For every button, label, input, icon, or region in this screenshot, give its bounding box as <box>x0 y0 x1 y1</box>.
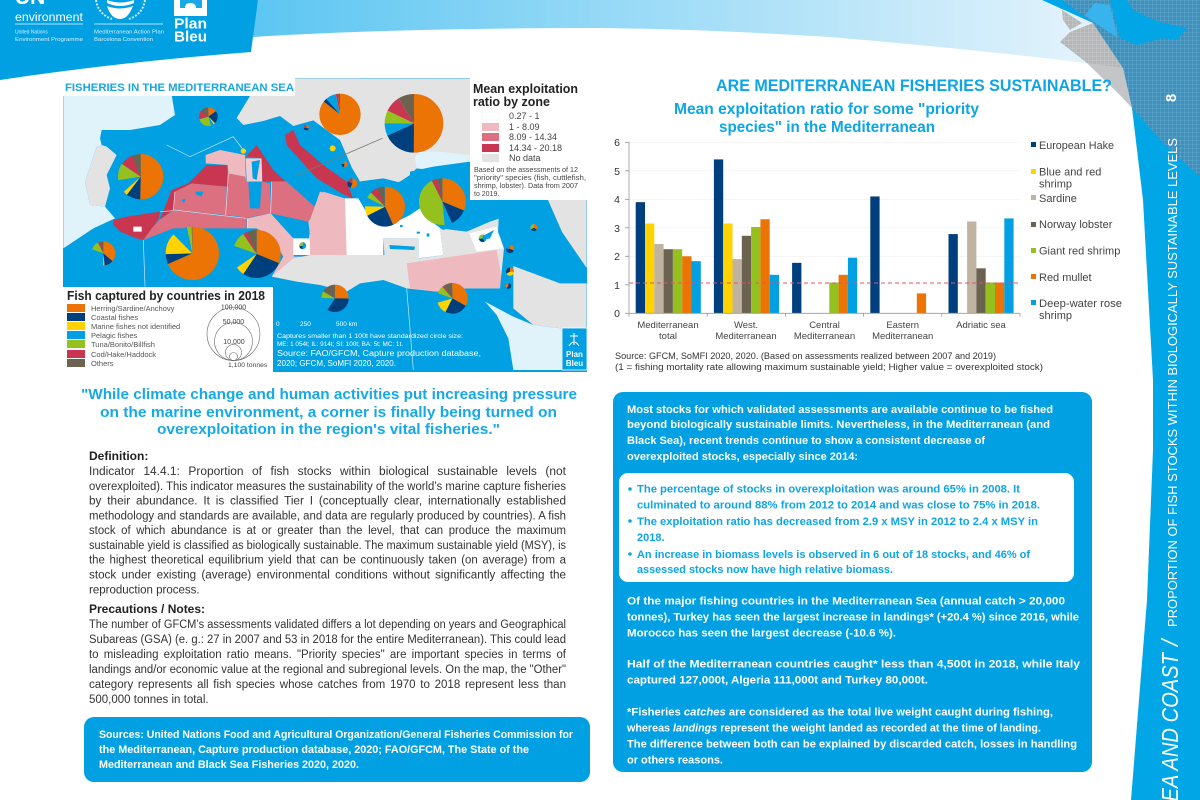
pie: Libya <box>328 291 342 305</box>
pie: Slovenia <box>305 126 308 129</box>
logo: Mediterranean Action Plan: Barcelona Convention <box>94 37 153 43</box>
white bullet box: The exploitation ratio has decreased from 2.9 x MSY in 2012 to 2.4 x MSY in <box>637 516 1038 528</box>
lower text: tonnes), Turkey has seen the largest increase in landings* (+20.4 %) since 2016, while <box>627 612 1079 624</box>
y axis labels: 6 <box>614 137 620 149</box>
logo: Plan Bleu: Plan <box>174 16 207 32</box>
white bullet box: assessed stocks now have high relative biomass. <box>637 564 893 576</box>
x axis labels: West. <box>734 320 758 331</box>
intro text <box>627 404 1053 463</box>
quote <box>81 387 577 438</box>
text block: precautions: 500,000 tonnes in total. <box>89 694 209 706</box>
logo: Mediterranean Action Plan: Mediterranean Action Plan <box>94 30 164 36</box>
text block: precautions: landings and/or economic value at the regional and subregional levels. On the map, the "Other" <box>89 664 566 676</box>
pie: Algeria <box>179 240 206 267</box>
lower text: Half of the Mediterranean countries caught* less than 4,500t in 2018, while Italy <box>627 658 1081 670</box>
legend: fish captured by countries: 10,000 <box>223 339 245 346</box>
chart legend: Red mullet <box>1039 272 1092 284</box>
y axis labels: 0 <box>614 308 620 320</box>
logo: Plan Bleu: Bleu <box>174 30 207 46</box>
pie: Monaco <box>241 148 246 154</box>
map notes: 2020; GFCM, SoMFI 2020, 2020. <box>277 359 396 368</box>
x axis labels: Mediterranean <box>872 331 933 342</box>
y axis labels: 2 <box>614 251 620 263</box>
logo: Plan Bleu on map: Bleu <box>566 359 583 368</box>
vertical separator: / <box>1157 637 1183 648</box>
text block: definition: methodology and standards are available, and data are regularly produced by countries). A fish <box>89 510 566 522</box>
logo: Plan Bleu <box>174 0 207 46</box>
text block: precautions <box>89 602 567 706</box>
y axis labels: 5 <box>614 166 620 178</box>
map notes: Source: FAO/GFCM, Capture production database, <box>277 349 481 358</box>
chart title <box>674 101 979 136</box>
legend: fish captured by countries: 100,000 <box>221 304 246 312</box>
text block: definition <box>89 449 567 596</box>
map notes: 250 <box>300 321 311 328</box>
lower text: The difference between both can be explained by discarded catch, losses in handling <box>627 738 1077 750</box>
x axis labels <box>637 320 1007 342</box>
logo: Mediterranean Action Plan <box>94 0 164 43</box>
lower text: Of the major fishing countries in the Mediterranean Sea (annual catch > 20,000 <box>627 596 1065 608</box>
legend: fish captured by countries: Cod/Hake/Haddock <box>91 350 156 359</box>
legend: fish captured by countries: Others <box>91 359 114 368</box>
panel: key messages <box>613 392 1092 772</box>
map notes: 0 <box>276 321 280 328</box>
legend: mean exploitation ratio by zone: 8.09 - 14.34 <box>509 132 557 142</box>
map notes: Captures smaller than 1 100t have standardized circle size: <box>277 333 463 340</box>
logo: UN environment <box>15 0 84 43</box>
white bullet box: An increase in biomass levels is observed in 6 out of 18 stocks, and 46% of <box>637 549 1030 561</box>
map notes: 500 km <box>336 321 357 328</box>
legend: mean exploitation ratio by zone: to 2019. <box>474 191 499 198</box>
quote: on the marine environment, a corner is finally being turned on <box>100 405 557 421</box>
x axis labels: Mediterranean <box>637 320 699 331</box>
intro text: Black Sea), recent trends continue to show a consistent decrease of <box>627 435 985 447</box>
chart legend: Blue and red <box>1039 166 1101 178</box>
legend: mean exploitation ratio by zone: No data <box>509 153 541 163</box>
text block: definition: stock of which abundance is at or greater than the level, that can produce the maximum <box>89 525 566 537</box>
text block: definition: stock under existing (average) environmental conditions without significantly affecting the <box>89 570 566 582</box>
quote: "While climate change and human activities put increasing pressure <box>81 387 577 403</box>
chart legend: Sardine <box>1039 193 1077 205</box>
x axis labels: Mediterranean <box>794 331 855 342</box>
chart legend: shrimp <box>1039 310 1072 322</box>
logo: Plan Bleu on map: Plan <box>566 350 583 359</box>
panel: sources: Sources: United Nations Food and Agricultural Organization/General Fisheries Commission for <box>99 729 574 741</box>
chart legend <box>1031 140 1122 322</box>
legend: fish captured by countries: Coastal fishes <box>91 313 138 322</box>
chart legend: Giant red shrimp <box>1039 246 1120 258</box>
reference line at 1 <box>629 282 1020 284</box>
chart legend: Norway lobster <box>1039 219 1113 231</box>
legend: fish captured by countries: Fish captured by countries in 2018 <box>67 288 265 303</box>
text block: definition: reproduction process. <box>89 584 200 596</box>
pies, west <box>97 112 308 287</box>
pies, east <box>296 104 536 306</box>
legend: fish captured by countries: Tuna/Bonito/Billfish <box>91 340 155 349</box>
chart source: Source: GFCM, SoMFI 2020, 2020. (Based on assessments realized between 2007 and 2019) <box>615 351 996 361</box>
lower text: *Fisheries catches are considered as the total live weight caught during fishing, <box>627 706 1053 718</box>
text block: definition: Definition: <box>89 449 148 463</box>
chart title: species" in the Mediterranean <box>719 119 935 136</box>
pie: Italy <box>399 109 429 138</box>
lower text: or others reasons. <box>627 754 723 766</box>
map regions, east <box>272 78 587 370</box>
pie: Tunisia <box>245 242 269 266</box>
white bullet box <box>619 473 1074 582</box>
map notes: ME: 1 054t; IL: 914t; SI: 100t; BA: 5t; MC: 1t. <box>277 341 403 348</box>
chart legend: shrimp <box>1039 178 1072 190</box>
map notes <box>276 321 481 368</box>
small pies <box>301 145 536 287</box>
legend: mean exploitation ratio by zone: 0.27 - 1 <box>509 111 540 121</box>
chart source: (1 = fishing mortality rate allowing maximum sustainable yield; Higher value = overexploited stock) <box>615 362 1043 372</box>
logo: Plan Bleu on map <box>562 328 587 370</box>
map title <box>63 78 295 96</box>
text block: precautions: to misleading exploitation ratio means. "Priority species" are important species in terms of <box>89 649 567 661</box>
text block: definition: overexploited). This indicator measures the sustainability of the world’s marine capture fisheries <box>89 481 566 493</box>
vertical indicator title: PROPORTION OF FISH STOCKS WITHIN BIOLOGICALLY SUSTAINABLE LEVELS <box>1165 138 1180 627</box>
white bullet box: 2018. <box>637 532 665 544</box>
legend: fish captured by countries: 1,100 tonnes <box>228 362 268 369</box>
legend: fish captured by countries: 50,000 <box>223 319 244 326</box>
legend: fish captured by countries: Pelagic fishes <box>91 331 138 340</box>
heading: are fisheries sustainable: ARE MEDITERRANEAN FISHERIES SUSTAINABLE? <box>716 76 1112 95</box>
x axis labels: Central <box>809 320 840 331</box>
text block: definition: sustainable yield is classified as biologically sustainable. The maximum sustainable yield (MSY), is <box>89 540 566 552</box>
x axis labels: Mediterranean <box>715 331 777 342</box>
panel: sources: the Mediterranean, Capture production database, 2020; FAO/GFCM, The State of the <box>99 744 529 756</box>
pie: Croatia <box>330 104 350 125</box>
x axis labels: Adriatic sea <box>956 320 1007 331</box>
page number: 8 <box>1163 94 1180 102</box>
y axis labels <box>614 137 620 320</box>
pie: Spain <box>129 165 152 188</box>
legend: fish captured by countries: Marine fishes not identified <box>91 322 180 331</box>
lower text: whereas landings represent the weight landed as recorded at the time of landing. <box>626 722 1041 734</box>
lower text: captured 127,000t, Algeria 111,000t and Turkey 80,000t. <box>627 674 928 686</box>
legend: mean exploitation ratio by zone: shrimp, lobster). Data from 2007 <box>474 183 578 190</box>
map title: FISHERIES IN THE MEDITERRANEAN SEA <box>65 82 294 94</box>
text block: precautions: category represents all fish species whose catches from 1970 to 2018 represent less than <box>89 679 566 691</box>
panel: sources: Mediterranean and Black Sea Fisheries 2020, 2020. <box>99 759 359 771</box>
text block: definition: Indicator 14.4.1: Proportion of fish stocks within biological sustainable levels (not <box>89 466 567 478</box>
text block: precautions: The number of GFCM’s assessments validated differs a lot depending on years and Geographical <box>89 619 566 631</box>
y axis labels: 3 <box>614 223 620 235</box>
text block: precautions: Precautions / Notes: <box>89 602 205 616</box>
legend: fish captured by countries <box>63 287 273 372</box>
legend: mean exploitation ratio by zone: Mean exploitation <box>473 81 578 96</box>
pie: Greece <box>375 197 395 217</box>
chart title: Mean exploitation ratio for some "priority <box>674 101 979 118</box>
logo: UN environment: Environment Programme <box>15 37 83 43</box>
white bullet box: culminated to around 88% from 2012 to 2014 and was close to 75% in 2018. <box>637 500 1040 512</box>
pie: Egypt <box>445 291 460 306</box>
pie: Turkey <box>431 190 454 213</box>
proportional circle scale <box>207 308 260 360</box>
panel: map of Mediterranean fisheries <box>63 78 587 372</box>
intro text: overexploited stocks, especially since 2014: <box>627 451 858 463</box>
legend: mean exploitation ratio by zone <box>470 78 587 200</box>
quote: overexploitation in the region's vital fisheries." <box>157 422 500 438</box>
y axis labels: 1 <box>614 280 620 292</box>
lower text <box>626 596 1081 766</box>
leader line to Italy <box>296 138 382 176</box>
legend: mean exploitation ratio by zone: 1 - 8.09 <box>509 122 540 132</box>
pie: Morocco <box>97 247 109 259</box>
logo: UN environment: United Nations <box>15 30 48 36</box>
chart legend: European Hake <box>1039 140 1114 152</box>
intro text: beyond biologically sustainable limits. Nevertheless, in the Mediterranean (and <box>627 419 1050 431</box>
panel: sources <box>84 717 590 782</box>
legend: mean exploitation ratio by zone: ratio by zone <box>473 94 550 109</box>
chart source <box>615 351 1043 372</box>
white bullet box: The percentage of stocks in overexploitation was around 65% in 2008. It <box>637 484 1020 496</box>
logo: UN environment: environment <box>15 12 84 24</box>
legend: mean exploitation ratio by zone: "priority" species (fish, cuttlefish, <box>474 175 586 182</box>
x axis labels: total <box>659 331 677 342</box>
intro text: Most stocks for which validated assessments are available continue to be fished <box>627 404 1053 416</box>
legend: fish captured by countries: Herring/Sardine/Anchovy <box>91 304 175 313</box>
pie: France <box>204 112 213 121</box>
legend: mean exploitation ratio by zone: 14.34 - 20.18 <box>509 143 562 153</box>
bar chart <box>614 137 1020 342</box>
chart legend: Deep-water rose <box>1039 298 1122 310</box>
header logo block <box>0 0 258 80</box>
lower text: Morocco has seen the largest decrease (-10.6 %). <box>627 628 896 640</box>
header gradient banner <box>252 0 1094 64</box>
legend: mean exploitation ratio by zone: Based on the assessments of 12 <box>474 167 578 174</box>
text block: definition: the highest theoretical equilibrium yield that can be continuously taken (on average) from a <box>89 554 567 566</box>
map regions, west <box>63 78 360 277</box>
y axis labels: 4 <box>614 194 620 206</box>
text block: precautions: Subareas (GSA) (e. g.: 27 in 2007 and 53 in 2018 for the entire Mediterranean). This could lead <box>89 634 566 646</box>
right side band <box>1042 0 1200 800</box>
text block: definition: by their abundance. It is classified Tier I (conceptually clear, internationally established <box>89 496 566 508</box>
x axis labels: Eastern <box>886 320 919 331</box>
